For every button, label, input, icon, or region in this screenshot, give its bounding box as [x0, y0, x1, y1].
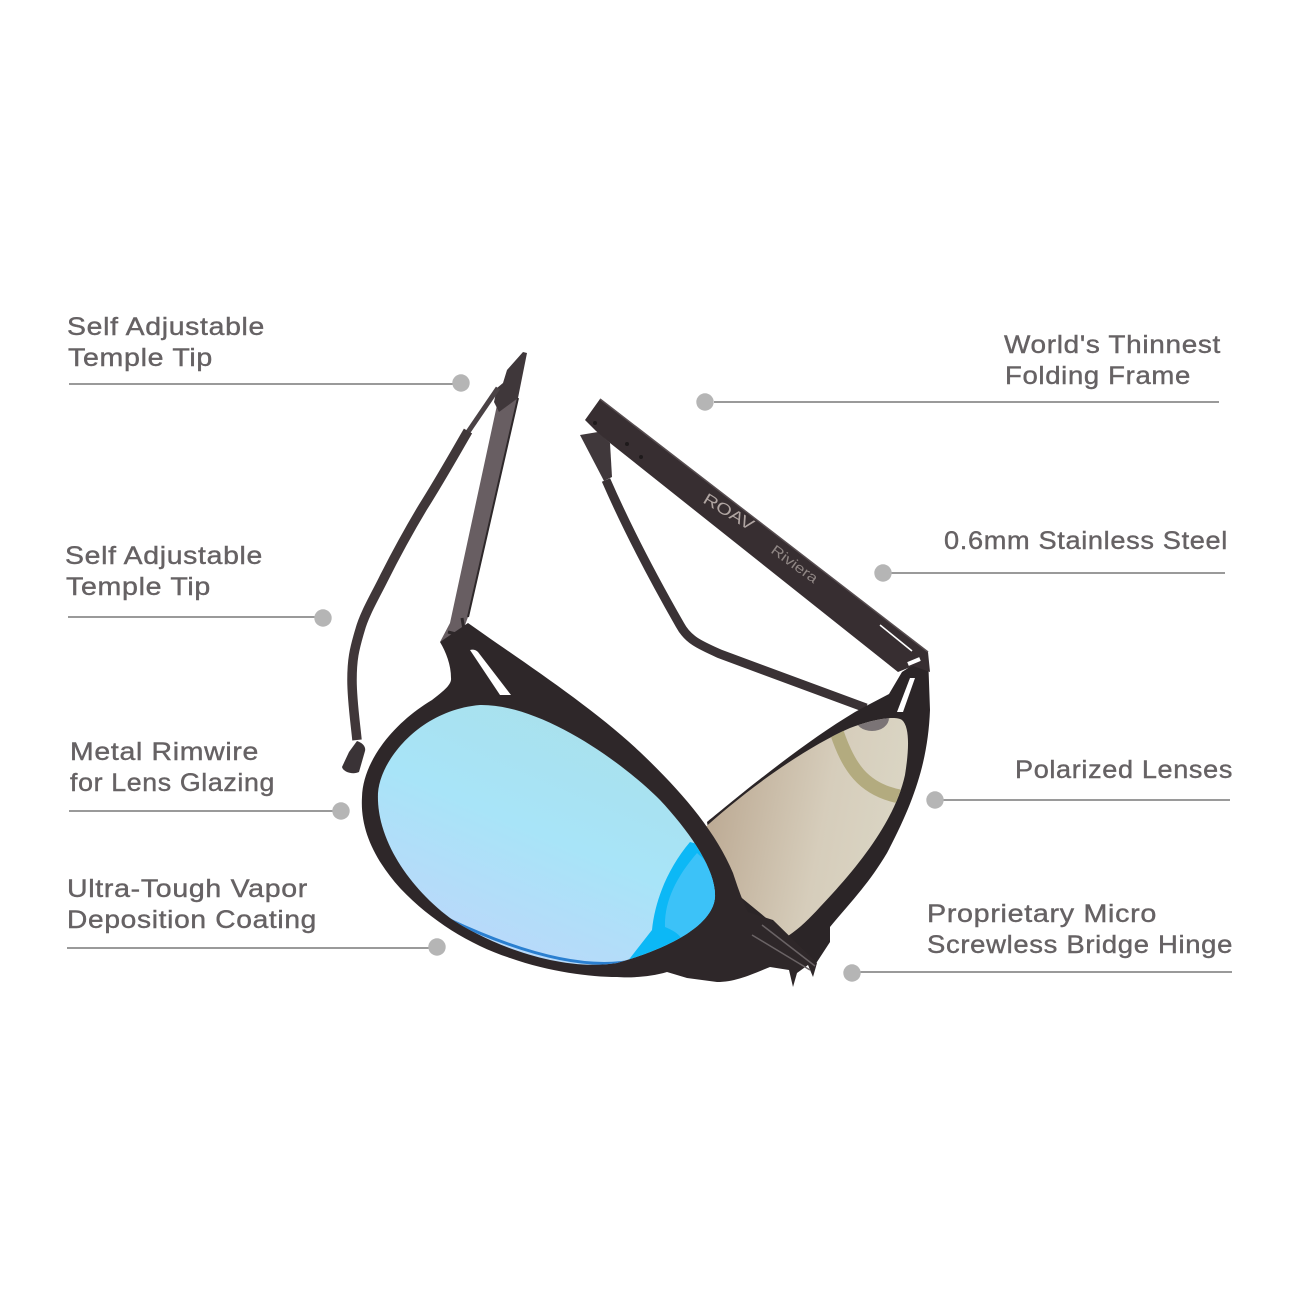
callout: self adjustable temple tip lower: Self Adjustable — [65, 542, 263, 570]
bridge slot — [470, 650, 511, 695]
lens patch below hinge — [729, 943, 752, 958]
callout: self adjustable temple tip top — [67, 313, 470, 392]
callout: self adjustable temple tip top: Self Adjustable — [67, 313, 265, 341]
callout: metal rimwire: for Lens Glazing — [70, 769, 275, 797]
back frame rim — [707, 655, 930, 972]
callout: metal rimwire: Metal Rimwire — [70, 738, 259, 766]
hinge detail — [752, 925, 815, 970]
arm model text: Riviera — [768, 541, 822, 586]
callout: thinnest folding frame: World's Thinnest — [1004, 331, 1221, 359]
callout: self adjustable temple tip lower: Temple Tip — [66, 573, 211, 601]
callout: bridge hinge: Screwless Bridge Hinge — [927, 931, 1233, 959]
callout: polarized lenses: Polarized Lenses — [1015, 756, 1233, 784]
callout: metal rimwire — [69, 738, 350, 820]
left temple arm — [342, 352, 527, 773]
sunglasses illustration — [342, 352, 930, 987]
back lens — [706, 718, 908, 936]
callout: self adjustable temple tip lower — [65, 542, 332, 627]
callout: vapor deposition coating — [67, 875, 446, 956]
callout: self adjustable temple tip top: Temple Tip — [68, 344, 213, 372]
callout: stainless steel — [874, 527, 1228, 582]
arm brand text: ROAV — [700, 491, 757, 534]
callout: thinnest folding frame — [696, 331, 1221, 411]
callout: vapor deposition coating: Deposition Coating — [67, 906, 317, 934]
right temple wire — [580, 432, 866, 708]
callout: thinnest folding frame: Folding Frame — [1005, 362, 1191, 390]
callout: vapor deposition coating: Ultra-Tough Vapor — [67, 875, 308, 903]
callout: bridge hinge — [843, 900, 1233, 982]
front frame — [362, 623, 817, 987]
front lens — [370, 700, 720, 970]
white slit in back bridge — [897, 678, 915, 712]
right temple arm — [585, 399, 930, 672]
callout: stainless steel: 0.6mm Stainless Steel — [944, 527, 1228, 555]
callout: bridge hinge: Proprietary Micro — [927, 900, 1157, 928]
callout: polarized lenses — [926, 756, 1233, 809]
